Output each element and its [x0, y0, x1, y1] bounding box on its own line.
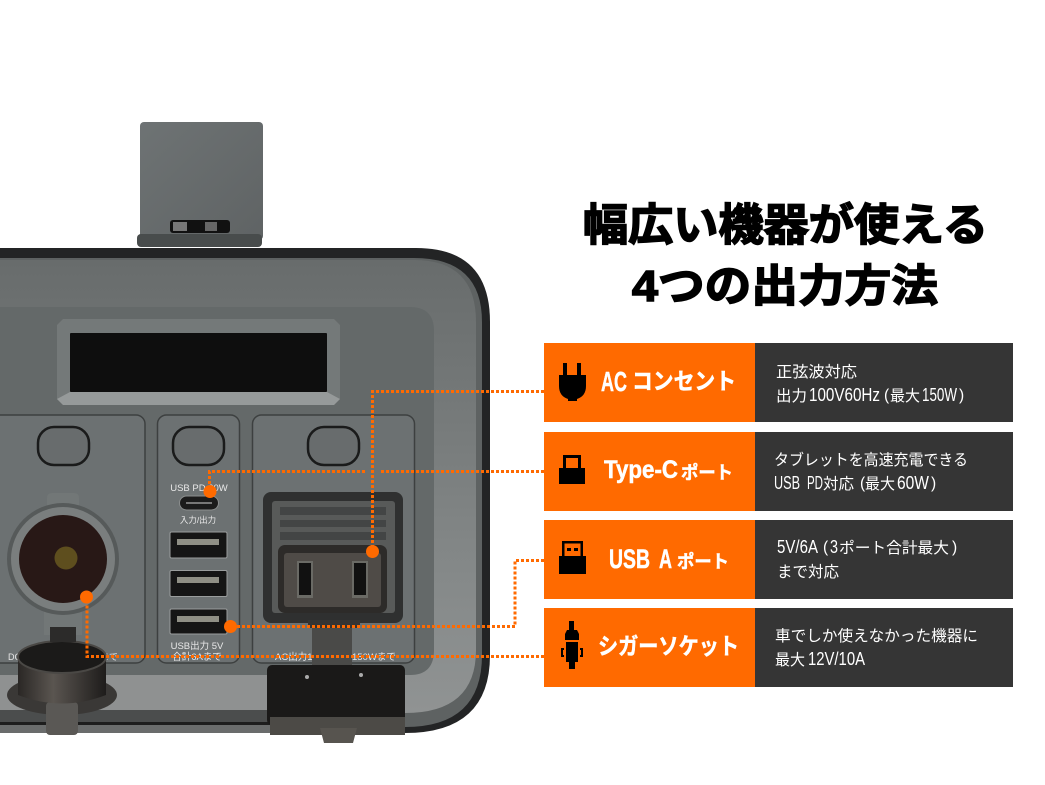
label: Type-C: ポート [681, 462, 733, 483]
text: USB A description: まで対応 [777, 563, 839, 581]
text: Type-C description: タブレットを高速充電できる [774, 450, 968, 469]
text: cigar description: 最大 [775, 651, 805, 669]
text: USB A description: 5V/6A [777, 537, 818, 557]
text: AC description: 正弦波対応 [776, 363, 858, 381]
text: cigar description [775, 627, 978, 669]
label: USB A: ポート [677, 551, 729, 572]
label: USB A: A [659, 544, 672, 574]
line: cigar [87, 597, 544, 656]
text: AC description: 出力 [776, 387, 807, 405]
label: AC outlet: コンセント [632, 368, 736, 394]
row: cigar socket [544, 608, 1013, 687]
label: Type-C: Type-C [604, 456, 678, 484]
line: USB A [230, 560, 544, 626]
device: power station front [0, 122, 490, 743]
line: AC [372, 392, 544, 551]
connection dots [80, 485, 379, 633]
panel: USB section [158, 415, 240, 663]
text: AC description: 150W [922, 385, 957, 405]
panel: AC section [252, 415, 414, 663]
panel: USB section: USB PD 60W [170, 483, 228, 494]
text: AC description: 最大 [890, 387, 920, 405]
icon: AC plug [559, 363, 586, 401]
panel: cigar socket section [0, 415, 145, 663]
label: USB A [609, 544, 729, 574]
row: Type-C [544, 432, 1013, 511]
text: Type-C description: 60W [897, 473, 929, 493]
row: USB A [544, 520, 1013, 599]
panel: USB section: 合計6Aまで [172, 651, 222, 663]
text: Type-C description: ( [860, 475, 866, 492]
leader lines [87, 392, 544, 656]
text: Type-C description: 最大 [865, 475, 895, 493]
icon: USB A [559, 541, 586, 574]
handle [137, 122, 263, 247]
label: cigar socket: シガーソケット [598, 633, 739, 659]
row: AC outlet [544, 343, 1013, 422]
label: AC outlet [601, 366, 736, 397]
text: Type-C description: 対応 [823, 475, 854, 493]
text: AC description: ) [959, 387, 964, 404]
panel: AC section: AC出力10 [275, 651, 318, 663]
USB A ports [170, 532, 227, 634]
panel: AC section: 150Wまで [352, 652, 396, 663]
icon: Type-C [559, 455, 585, 484]
text: cigar description: 車でしか使えなかった機器に [775, 627, 978, 645]
text: Type-C description: ) [931, 475, 936, 492]
text: AC description: 100V60Hz [809, 385, 880, 405]
panel: USB section: 入力/出力 [180, 515, 216, 525]
line: Type-C [210, 472, 544, 491]
cap: cigar socket [7, 627, 117, 735]
text: AC description: ( [884, 387, 890, 404]
display screen [57, 319, 340, 405]
title [583, 201, 988, 311]
label: AC outlet: AC [601, 366, 627, 397]
text: Type-C description: PD [807, 473, 823, 493]
label: USB A: USB [609, 544, 650, 574]
icon: cigar plug [561, 621, 583, 669]
title: 幅広い機器が使える [583, 201, 988, 250]
front panel [0, 307, 434, 675]
panel: cigar socket section: DC [8, 652, 21, 662]
text: USB A description [777, 537, 957, 581]
text: AC description [776, 363, 964, 405]
panel: cigar socket section: まで [100, 652, 118, 662]
text: USB A description: 3 [830, 537, 838, 557]
cap: AC outlet [267, 620, 405, 743]
text: cigar description: 12V/10A [808, 649, 865, 669]
text: Type-C description [774, 450, 968, 493]
panel: USB section: USB出力 5V [171, 640, 224, 652]
title: 4つの出力方法 [632, 262, 938, 311]
label: Type-C [604, 456, 733, 484]
text: Type-C description: USB [774, 473, 800, 493]
text: USB A description: ポート合計最大 [839, 539, 949, 557]
text: USB A description: ( [823, 539, 829, 556]
text: USB A description: ) [952, 539, 957, 556]
body casing [0, 248, 490, 733]
